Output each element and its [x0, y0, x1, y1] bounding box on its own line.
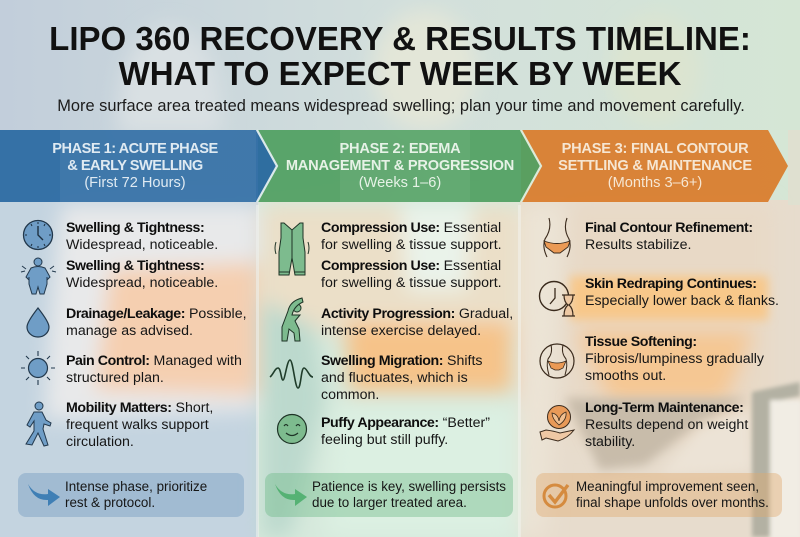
text: mobility: [66, 400, 213, 450]
text: puffy appearance: feeling but still puffy.: [321, 432, 448, 448]
icon: stretching figure: [282, 297, 304, 342]
text: pain control: Pain Control: Managed with: [66, 353, 242, 369]
icon: clock: [22, 220, 54, 250]
text: mobility: circulation.: [66, 434, 134, 450]
phase 2 heading: PHASE 2: EDEMA: [340, 141, 460, 157]
text: skin redraping: [585, 276, 779, 309]
phase 3 heading: PHASE 3: FINAL CONTOUR: [562, 141, 748, 157]
text: activity: intense exercise delayed.: [321, 323, 481, 339]
text: migration: Swelling Migration: Shifts: [321, 353, 483, 369]
phase 1 heading: & EARLY SWELLING: [67, 158, 203, 174]
icon: circled torso: [539, 343, 575, 379]
text: phase 2 note: [312, 479, 506, 510]
icon: clock and hourglass: [538, 280, 575, 317]
text: drainage: Drainage/Leakage: Possible,: [66, 306, 247, 322]
text: swelling and tightness repeat: Swelling & Tightness:: [66, 258, 204, 274]
icon: blue arrow: [28, 484, 60, 506]
title: LIPO 360 RECOVERY & RESULTS TIMELINE:: [49, 20, 751, 57]
text: mobility: frequent walks support: [66, 417, 209, 433]
text: migration: common.: [321, 387, 379, 403]
text: tissue softening: [585, 334, 764, 384]
text: tissue softening: Tissue Softening:: [585, 334, 697, 350]
text: final contour: Final Contour Refinement:: [585, 220, 753, 236]
text: migration: [321, 353, 483, 403]
phase 2 heading: (Weeks 1–6): [359, 175, 441, 191]
text: phase 1 note: Intense phase, prioritize: [65, 479, 207, 494]
icon: compression garment: [274, 222, 310, 276]
icon: walking person: [25, 402, 52, 447]
phase 3 heading: [558, 141, 752, 191]
text: phase 3 note: Meaningful improvement seen,: [576, 479, 759, 494]
callout: phase 2: [265, 473, 513, 517]
icon: waist: [543, 218, 571, 258]
text: maintenance: Results depend on weight: [585, 417, 748, 433]
text: skin redraping: Especially lower back & flanks.: [585, 293, 779, 309]
text: phase 1 note: [65, 479, 207, 510]
callout: phase 3: [536, 473, 782, 517]
icon: pain sun: [21, 351, 55, 385]
callout: phase 1: [18, 473, 244, 517]
text: swelling and tightness: [66, 220, 218, 253]
icon: hand and leaf: [539, 405, 576, 442]
panel: phase 3 items: [538, 218, 779, 450]
text: tissue softening: smooths out.: [585, 368, 666, 384]
text: pain control: structured plan.: [66, 370, 164, 386]
phase 1 heading: (First 72 Hours): [84, 175, 186, 191]
text: phase 3 note: [576, 479, 769, 510]
phase 3 heading: (Months 3–6+): [608, 175, 702, 191]
text: swelling and tightness repeat: [66, 258, 218, 291]
text: tissue softening: Fibrosis/lumpiness gradually: [585, 351, 764, 367]
icon: green arrow: [275, 484, 307, 506]
phase 2 heading: [286, 141, 514, 191]
text: compression use: Compression Use: Essential: [321, 220, 501, 236]
text: compression use: for swelling & tissue support.: [321, 237, 502, 253]
text: puffy appearance: [321, 415, 490, 448]
text: swelling and tightness: Widespread, noticeable.: [66, 237, 218, 253]
text: compression use: [321, 220, 502, 253]
text: drainage: manage as advised.: [66, 323, 193, 339]
phase 2 heading: MANAGEMENT & PROGRESSION: [286, 158, 514, 174]
text: activity: Activity Progression: Gradual,: [321, 306, 513, 322]
phase 1 heading: PHASE 1: ACUTE PHASE: [52, 141, 218, 157]
text: compression use repeat: Compression Use: Essential: [321, 258, 501, 274]
text: maintenance: [585, 400, 748, 450]
text: phase 3 note: final shape unfolds over months.: [576, 495, 769, 510]
text: final contour: [585, 220, 753, 253]
text: mobility: Mobility Matters: Short,: [66, 400, 213, 416]
text: migration: and fluctuates, which is: [321, 370, 468, 386]
text: swelling and tightness repeat: Widespread, noticeable.: [66, 275, 218, 291]
text: activity: [321, 306, 513, 339]
text: pain control: [66, 353, 242, 386]
icon: swelling wave: [270, 359, 313, 389]
text: drainage: [66, 306, 247, 339]
text: maintenance: Long-Term Maintenance:: [585, 400, 743, 416]
phase 3 heading: SETTLING & MAINTENANCE: [558, 158, 752, 174]
panel: phase 1 items: [20, 220, 247, 450]
text: phase 2 note: due to larger treated area.: [312, 495, 467, 510]
subtitle: More surface area treated means widespread swelling; plan your time and movement carefully.: [57, 97, 745, 115]
text: puffy appearance: Puffy Appearance: “Better”: [321, 415, 490, 431]
text: compression use repeat: for swelling & tissue support.: [321, 275, 502, 291]
text: swelling and tightness: Swelling & Tightness:: [66, 220, 204, 236]
text: compression use repeat: [321, 258, 502, 291]
text: phase 1 note: rest & protocol.: [65, 495, 155, 510]
icon: check badge: [542, 484, 570, 508]
title: WHAT TO EXPECT WEEK BY WEEK: [119, 55, 681, 92]
panel: phase 2 items: [270, 220, 513, 448]
text: phase 2 note: Patience is key, swelling persists: [312, 479, 506, 494]
text: maintenance: stability.: [585, 434, 635, 450]
icon: smiley: [276, 414, 308, 444]
text: final contour: Results stabilize.: [585, 237, 691, 253]
icon: swollen body: [20, 258, 56, 294]
phase 1 heading: [52, 141, 218, 191]
text: skin redraping: Skin Redraping Continues:: [585, 276, 757, 292]
icon: droplet: [26, 307, 50, 338]
title: [49, 20, 751, 92]
